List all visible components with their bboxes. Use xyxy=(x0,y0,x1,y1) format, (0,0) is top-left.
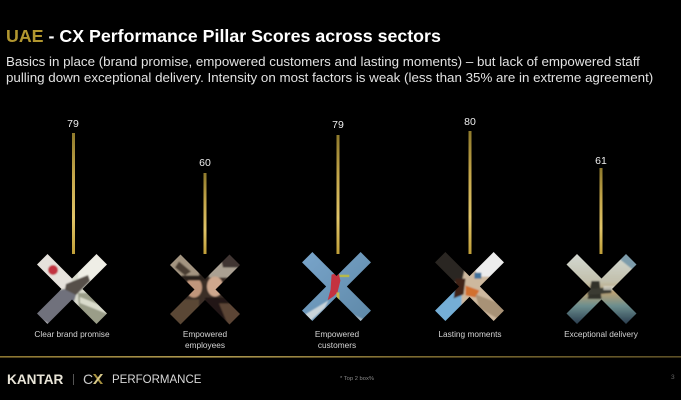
footer: Kantar logo text: KANTAR xyxy=(7,372,63,387)
score value: Empowered customers: 79 xyxy=(332,119,344,131)
score value: Empowered employees: 60 xyxy=(199,157,211,169)
icon: CX logo mark xyxy=(83,371,103,387)
gold bar 4 xyxy=(468,131,472,254)
score value: Lasting moments: 80 xyxy=(464,116,476,128)
gold bar 1 xyxy=(72,133,75,254)
gold bar 2 xyxy=(204,173,206,254)
icon: X photo, lasting moments xyxy=(435,252,504,321)
footer: Performance label: PERFORMANCE xyxy=(112,374,201,386)
label: Empowered customers: Empowered xyxy=(315,329,359,339)
label: Empowered employees xyxy=(183,329,227,350)
label: Clear brand promise: Clear brand promise xyxy=(34,329,110,339)
icon: X photo, customers xyxy=(302,252,371,321)
gold bar 3 xyxy=(336,135,340,254)
footer divider xyxy=(73,374,74,385)
subtitle text: Basics in place (brand promise, empowered customers and lasting moments) – but lack of empowered staff xyxy=(6,54,640,69)
chart: gold bars and X images xyxy=(0,131,681,385)
title: UAE - CX Performance Pillar Scores across sectors xyxy=(6,26,441,46)
icon: X photo, exceptional delivery xyxy=(566,254,636,324)
label: Empowered employees: Empowered xyxy=(183,329,227,339)
score value: Clear brand promise: 79 xyxy=(67,118,79,130)
label: Empowered employees: employees xyxy=(185,340,225,350)
subtitle text xyxy=(6,54,653,85)
score value: Exceptional delivery: 61 xyxy=(595,155,607,167)
icon: X photo, employees xyxy=(170,254,240,324)
icon: X photo, brand promise xyxy=(37,254,107,324)
label: Lasting moments: Lasting moments xyxy=(438,329,502,339)
subtitle text: pulling down exceptional delivery. Intensity on most factors is weak (less than 35% are in extreme agreement) xyxy=(6,70,653,85)
icon: CX logo mark: C xyxy=(83,371,93,387)
footnote: * Top 2 box% xyxy=(340,376,374,382)
label: Empowered customers xyxy=(315,329,359,350)
footer rule xyxy=(0,356,681,358)
label: Exceptional delivery: Exceptional delivery xyxy=(564,329,638,339)
gold bar 5 xyxy=(600,168,602,254)
page number: 3 xyxy=(671,374,675,381)
label: Empowered customers: customers xyxy=(318,340,356,350)
